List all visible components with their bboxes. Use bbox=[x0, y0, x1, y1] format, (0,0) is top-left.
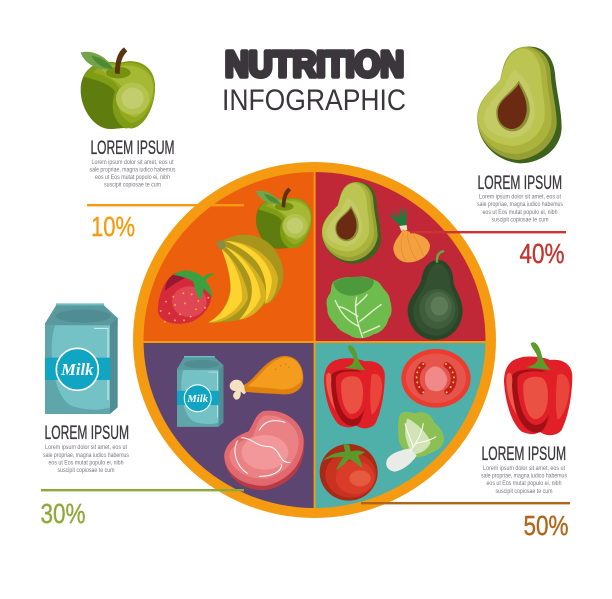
callout body text: sale propriae, magna iudico habemus bbox=[43, 452, 129, 459]
callout body text: suscipit copiosae te cum bbox=[496, 488, 552, 495]
callout body text: Lorem ipsum dolor sit amet, eos ut bbox=[45, 444, 127, 451]
icon: plate milk carton bbox=[177, 356, 223, 427]
callout leader line bbox=[87, 204, 244, 206]
callout body text: suscipit copiosae te cum bbox=[492, 216, 548, 224]
callout body text: Lorem ipsum dolor sit amet, eos ut bbox=[479, 194, 561, 200]
callout body text bbox=[43, 444, 129, 474]
callout heading: LOREM IPSUM bbox=[44, 422, 129, 444]
callout body text: sale propriae, magna iudico habemus bbox=[481, 472, 567, 480]
icon: plate bell pepper bbox=[324, 346, 385, 428]
callout body text: eos ut Eos mutat populo ei, nibh bbox=[48, 460, 124, 466]
title line: nutrition: NUTRITION bbox=[225, 44, 404, 84]
callout heading: LOREM IPSUM bbox=[478, 172, 562, 194]
icon: meat steak bbox=[224, 411, 304, 490]
percentage: 40%: 40% bbox=[520, 238, 564, 269]
title line: infographic: INFOGRAPHIC bbox=[222, 84, 406, 117]
callout body text bbox=[90, 159, 176, 188]
icon: tomato bbox=[320, 443, 378, 501]
avocado callout bbox=[410, 47, 566, 269]
icon: bok choy bbox=[386, 412, 444, 472]
icon: cabbage bbox=[327, 277, 392, 338]
callout body text bbox=[477, 194, 563, 224]
icon: bell pepper bbox=[504, 342, 572, 435]
milk callout bbox=[40, 303, 244, 529]
pepper callout bbox=[361, 342, 572, 541]
icon: milk carton bbox=[45, 303, 118, 414]
icon: plate avocado half bbox=[322, 182, 381, 264]
callout leader line bbox=[361, 502, 570, 504]
callout body text: eos ut Eos mutat populo ei, nibh bbox=[95, 174, 170, 181]
title bbox=[222, 44, 406, 117]
icon: onion bbox=[389, 207, 430, 262]
icon: strawberry bbox=[158, 271, 215, 324]
icon: tomato slice bbox=[401, 349, 471, 408]
callout heading: LOREM IPSUM bbox=[90, 137, 174, 159]
callout body text: suscipit copiosae te cum bbox=[104, 182, 161, 188]
plate ring bbox=[133, 162, 496, 518]
plate quadrants bbox=[144, 172, 486, 508]
icon: plate apple bbox=[256, 188, 312, 249]
callout leader line bbox=[410, 231, 566, 233]
plate chart bbox=[130, 160, 500, 522]
callout body text: eos ut Eos mutat populo ei, nibh bbox=[482, 209, 558, 216]
callout body text: suscipit copiosae te cum bbox=[58, 467, 114, 474]
icon: avocado half bbox=[477, 47, 562, 163]
icon: dark avocado bbox=[408, 251, 463, 340]
callout body text: eos ut Eos mutat populo ei, nibh bbox=[486, 480, 562, 487]
callout body text: sale propriae, magna iudico habemus bbox=[477, 201, 563, 208]
callout body text: Lorem ipsum dolor sit amet, eos ut bbox=[92, 159, 174, 166]
callout body text: sale propriae, magna iudico habemus bbox=[90, 166, 176, 174]
callout body text bbox=[481, 465, 567, 495]
icon: bananas bbox=[208, 235, 283, 323]
percentage: 30%: 30% bbox=[40, 498, 86, 529]
icon: apple bbox=[81, 47, 155, 129]
icon: chicken leg bbox=[230, 356, 303, 400]
percentage: 50%: 50% bbox=[524, 510, 568, 541]
callout body text: Lorem ipsum dolor sit amet, eos ut bbox=[483, 465, 565, 472]
callout leader line bbox=[41, 489, 244, 491]
percentage: 10%: 10% bbox=[91, 211, 135, 242]
apple callout bbox=[81, 47, 244, 242]
